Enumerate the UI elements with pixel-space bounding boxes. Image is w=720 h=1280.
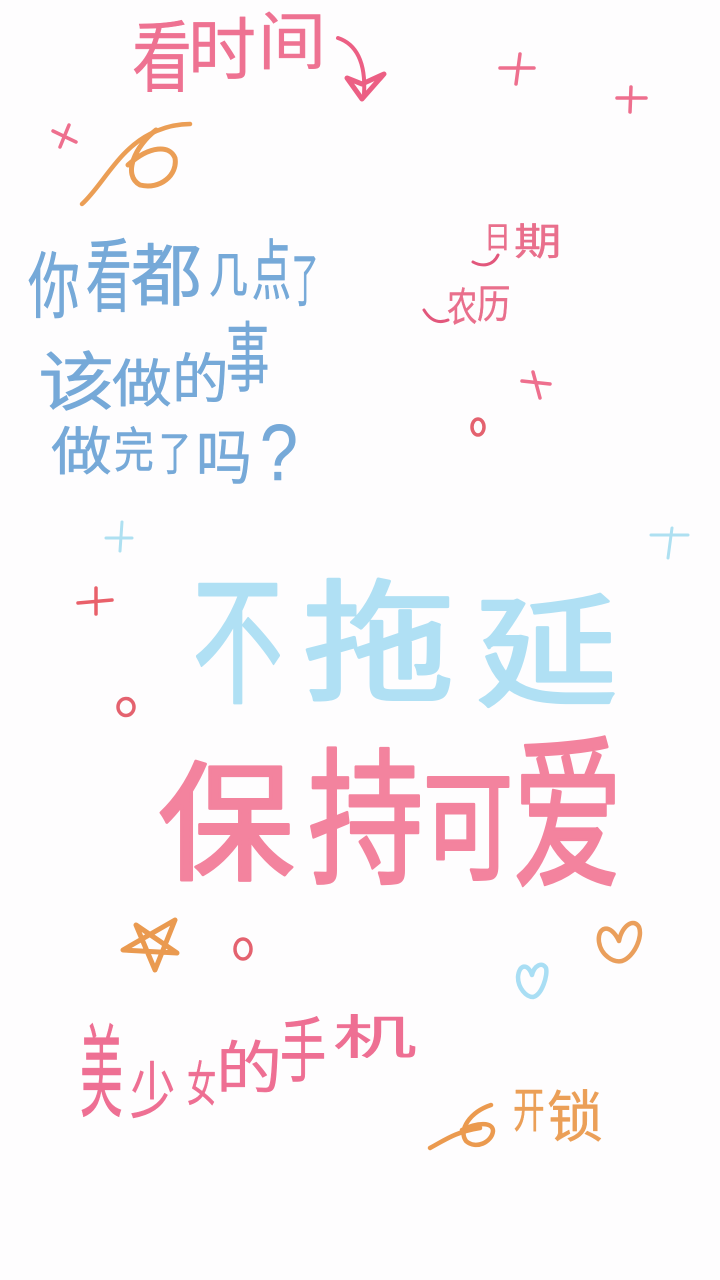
label: 开锁: 开	[513, 1083, 545, 1138]
text: 美少女的手机	[80, 1012, 417, 1131]
arrow: pointing down from 看时间	[338, 38, 384, 99]
text block: 你看都几点了: 你	[28, 248, 80, 328]
text block: 你看都几点了: 几	[209, 249, 248, 303]
main title: 不拖延: 延	[476, 585, 618, 722]
icon: orange heart	[599, 923, 640, 961]
decoration: blue sparkles	[106, 522, 688, 558]
decoration: red and pink sparkles	[53, 54, 646, 614]
text: 美少女的手机: 的	[216, 1037, 282, 1101]
text: 美少女的手机: 少	[130, 1057, 175, 1127]
text block: 该做的事: 做	[112, 355, 172, 413]
text block: 做完了吗?: 了	[159, 429, 191, 480]
text block: 做完了吗?	[51, 408, 298, 497]
main title: 保持可爱: 保	[158, 753, 294, 898]
heading: 看时间: 看	[132, 14, 192, 102]
text block: 你看都几点了: 点	[252, 236, 291, 309]
main title: 保持可爱: 持	[308, 739, 423, 904]
text: 美少女的手机: 机	[333, 1012, 417, 1064]
text block: 该做的事: 的	[172, 349, 229, 410]
label: 农历 with smile stroke: 历	[477, 282, 511, 327]
main title: 不拖延: 不	[193, 566, 283, 722]
main title: 保持可爱: 爱	[513, 724, 623, 909]
text block: 做完了吗?: ?	[260, 408, 298, 497]
icon: orange star	[123, 920, 177, 970]
label: 开锁	[513, 1083, 603, 1149]
label: 日期 with smile stroke: 日	[484, 222, 511, 255]
label: 开锁: 锁	[547, 1086, 603, 1149]
label: 农历 with smile stroke	[424, 282, 511, 330]
text: 美少女的手机: 手	[280, 1012, 326, 1091]
label: 农历 with smile stroke: 农	[447, 285, 477, 330]
text block: 该做的事	[38, 317, 269, 419]
text block: 你看都几点了: 都	[131, 238, 202, 315]
decoration: small circles	[118, 419, 484, 959]
heading: 看时间: 时	[188, 13, 256, 89]
text: 美少女的手机: 女	[187, 1059, 216, 1112]
text block: 做完了吗?: 吗	[196, 426, 252, 492]
text block: 做完了吗?: 完	[114, 425, 154, 478]
text: 美少女的手机: 美	[80, 1016, 123, 1131]
text block: 做完了吗?: 做	[51, 423, 112, 481]
text block: 你看都几点了	[28, 233, 318, 328]
text block: 该做的事: 事	[226, 317, 269, 402]
icon: orange curl with 6	[82, 124, 190, 204]
text block: 该做的事: 该	[38, 347, 115, 419]
main title: 保持可爱: 可	[423, 763, 513, 896]
icon: blue heart	[518, 965, 546, 997]
label: 日期 with smile stroke	[473, 221, 561, 265]
label: 日期 with smile stroke: 期	[514, 221, 561, 264]
heading: 看时间: 间	[258, 7, 326, 77]
text block: 你看都几点了: 看	[86, 233, 132, 322]
heading: 看时间	[132, 7, 326, 102]
icon: orange curl with 6 (unlock)	[430, 1105, 493, 1148]
main title: 不拖延: 拖	[303, 571, 455, 719]
text block: 你看都几点了: 了	[292, 248, 318, 314]
main title: 不拖延	[193, 566, 618, 722]
main title: 保持可爱	[158, 724, 623, 909]
